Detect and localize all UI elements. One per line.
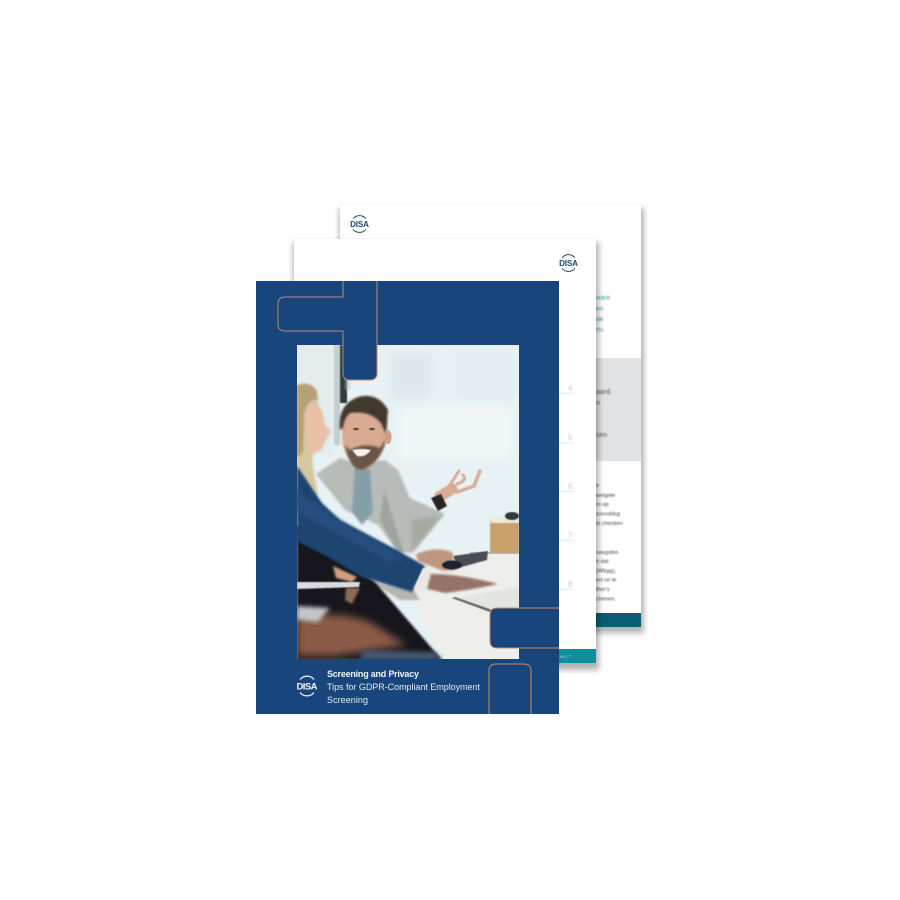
back page grey panel: aard. bbox=[596, 389, 612, 396]
decorative tab: bottom bbox=[489, 664, 531, 714]
middle page numbered list: 8 bbox=[568, 580, 573, 589]
middle page footer band bbox=[294, 649, 596, 663]
keyboard and mouse bbox=[453, 551, 488, 568]
cover photo bbox=[297, 345, 519, 660]
back page body text: n dat bbox=[596, 559, 609, 565]
back page teal intro text bbox=[595, 294, 610, 334]
cover subtitle: Tips for GDPR-Compliant Employment bbox=[327, 682, 480, 692]
back page body text: e bbox=[596, 483, 599, 489]
blurred foreground hand bbox=[297, 614, 406, 656]
man head bbox=[342, 401, 387, 470]
dark lower area bbox=[297, 525, 442, 660]
decorative tab: bottom right on photo bbox=[490, 608, 559, 648]
middle page bbox=[293, 239, 599, 670]
desk bbox=[395, 553, 519, 660]
cover logo bbox=[296, 676, 318, 696]
brochure mockup bbox=[256, 204, 648, 714]
back page body text: chenen. bbox=[596, 596, 616, 602]
back page body text: ther's bbox=[596, 587, 610, 593]
decorative tab: top vertical and left bbox=[278, 281, 377, 380]
back page teal intro text: de bbox=[596, 316, 604, 323]
man jacket bbox=[316, 458, 445, 553]
back page logo: DISA bbox=[350, 220, 369, 229]
cover logo: DISA bbox=[296, 681, 318, 692]
back page grey panel: sen bbox=[596, 432, 607, 439]
back page body text: (Wbgg), bbox=[596, 568, 616, 574]
middle page numbered list bbox=[559, 384, 574, 590]
back page teal intro text: ware bbox=[595, 294, 610, 302]
back page body text: savgsten bbox=[596, 550, 618, 556]
man raised hand bbox=[439, 471, 480, 497]
back page body text: ert on te bbox=[596, 578, 617, 584]
middle page logo: DISA bbox=[559, 259, 578, 268]
back page body text: zorvuldsg bbox=[596, 512, 620, 518]
middle page numbered list: 6 bbox=[568, 482, 573, 491]
window background bbox=[392, 355, 430, 395]
shirt cuff and hand bbox=[414, 568, 426, 589]
back page body text: wetgele bbox=[595, 493, 615, 499]
back page teal intro text: rts. bbox=[596, 326, 605, 334]
back page footer band bbox=[340, 613, 641, 627]
middle page numbered list: 7 bbox=[568, 531, 573, 540]
back page logo bbox=[350, 216, 369, 232]
cover subtitle: Screening bbox=[327, 695, 368, 705]
cover subtitle bbox=[327, 682, 480, 705]
back page body text: m op bbox=[596, 502, 608, 508]
back page grey panel: n bbox=[596, 400, 600, 407]
middle page numbered list: 5 bbox=[568, 433, 573, 442]
back page body text: ts checken bbox=[596, 521, 623, 527]
middle page logo bbox=[559, 255, 578, 271]
front cover bbox=[256, 281, 559, 714]
blue suit arm bbox=[297, 466, 425, 592]
middle page numbered list: 4 bbox=[568, 384, 573, 393]
back page grey panel bbox=[596, 358, 641, 461]
middle page: es | 7 bbox=[560, 654, 571, 659]
back page teal intro text: en bbox=[596, 306, 604, 312]
back page body text bbox=[595, 483, 623, 602]
wooden box on desk bbox=[490, 520, 519, 553]
woman bbox=[297, 384, 331, 505]
back page bbox=[339, 205, 644, 633]
cover title: Screening and Privacy bbox=[327, 669, 419, 679]
